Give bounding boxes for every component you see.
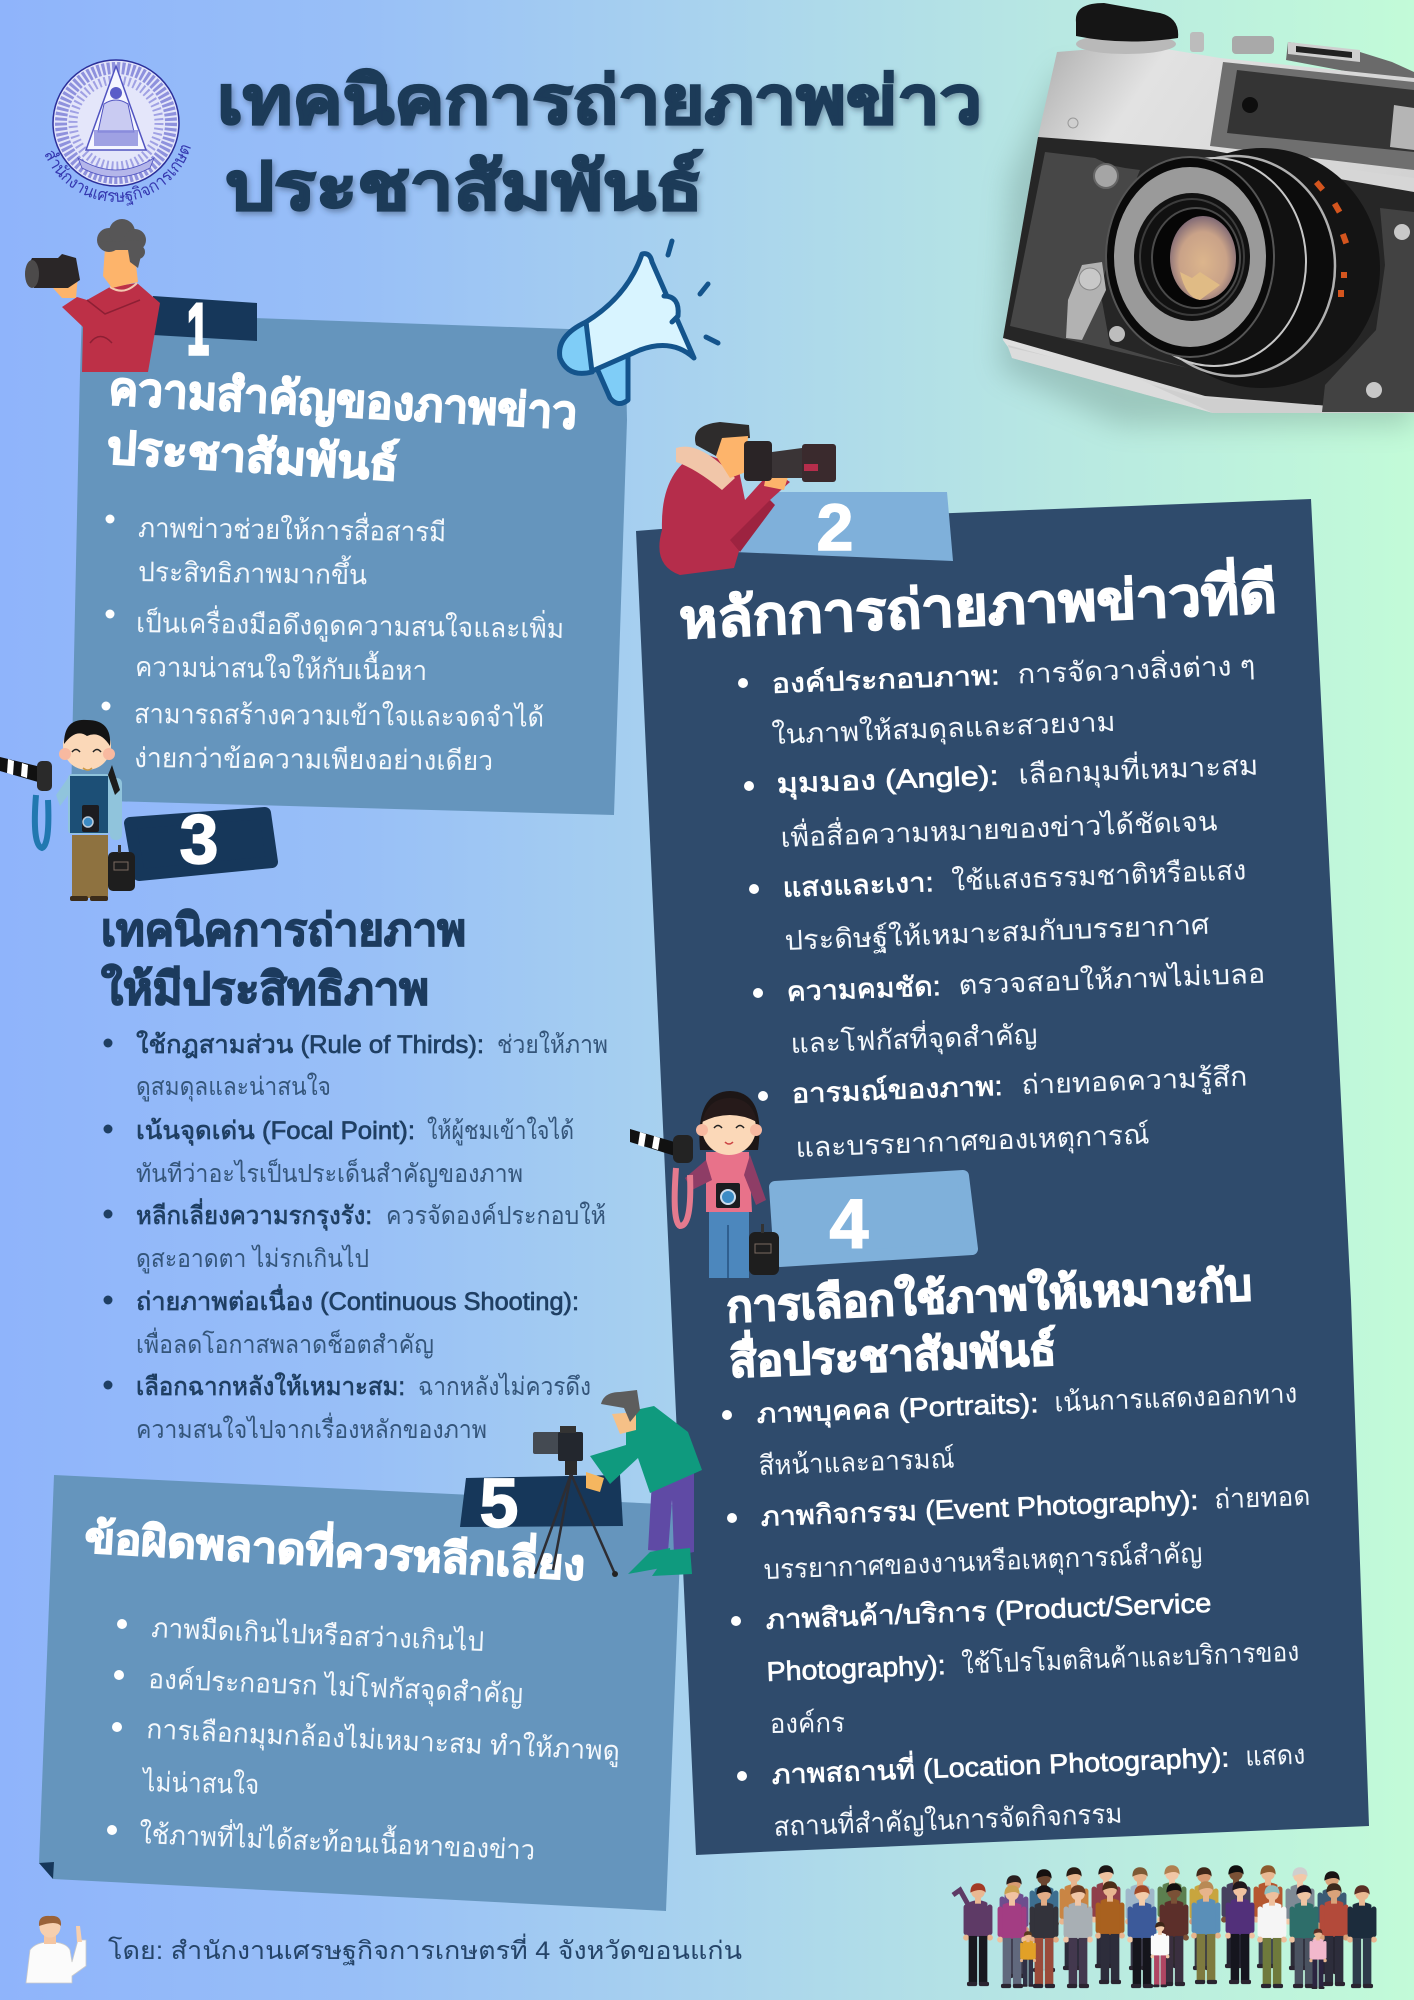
bullet list 3: ความสนใจไปจากเรื่องหลักของภาพ (136, 1412, 487, 1444)
title: ประชาสัมพันธ์ (225, 149, 703, 223)
bullet list 3: ถ่ายภาพต่อเนื่อง (Continuous Shooting): (136, 1284, 579, 1316)
heading 3: เทคนิคการถ่ายภาพ (101, 906, 466, 955)
bullet list 4: สถานที่สำคัญในการจัดกิจกรรม (773, 1795, 1123, 1842)
bullet list 2: ถ่ายทอดความรู้สึก (1021, 1062, 1248, 1101)
footer credit: โดย: สำนักงานเศรษฐกิจการเกษตรที่ 4 จังหวัดขอนแก่น (108, 1933, 742, 1965)
character: man with tripod, green hoodie (533, 1390, 702, 1577)
bullet list 4 (722, 1378, 1311, 1842)
heading 1: ประชาสัมพันธ์ (105, 421, 400, 490)
bullet list 4: เน้นการแสดงออกทาง (1054, 1378, 1298, 1418)
tab number 2 (734, 490, 953, 564)
panel 5: mistakes to avoid (39, 1464, 682, 1911)
tab number 1: 1 (187, 290, 209, 370)
bullet list 2 (738, 646, 1266, 1165)
heading 3 (101, 906, 466, 1014)
heading 4 (725, 1259, 1253, 1387)
panel 2: dark background (636, 499, 1369, 1855)
bullet list 3: เลือกฉากหลังให้เหมาะสม: (136, 1372, 405, 1401)
bullet list 2: เพื่อสื่อความหมายของข่าวได้ชัดเจน (780, 802, 1218, 853)
bullet list 5: องค์ประกอบรก ไม่โฟกัสจุดสำคัญ (148, 1663, 524, 1711)
bullet list 4: ภาพสินค้า/บริการ (Product/Service (765, 1588, 1212, 1635)
title (217, 63, 982, 223)
bullet list 3: ให้ผู้ชมเข้าใจได้ (427, 1116, 574, 1146)
bullet list 4: แสดง (1245, 1740, 1306, 1772)
bullet list 4: Photography): (766, 1650, 946, 1687)
tab number 4: 4 (830, 1185, 869, 1263)
bullet list 2: ในภาพให้สมดุลและสวยงาม (771, 706, 1116, 752)
tab number 4 (775, 1176, 972, 1263)
tab number 2 and panel 2/4 (636, 490, 1369, 1855)
heading 3: ให้มีประสิทธิภาพ (101, 963, 429, 1014)
tab number 2: 2 (817, 490, 853, 564)
heading 1 (105, 362, 579, 490)
heading 4: สื่อประชาสัมพันธ์ (728, 1318, 1057, 1387)
bullet list 1: สามารถสร้างความเข้าใจและจดจำได้ (134, 698, 544, 733)
bullet list 2: ตรวจสอบให้ภาพไม่เบลอ (958, 958, 1266, 1000)
heading 2: หลักการถ่ายภาพข่าวที่ดี (678, 555, 1278, 650)
bullet list 4: ภาพบุคคล (Portraits): (756, 1388, 1039, 1431)
bullet list 4: ถ่ายทอด (1214, 1481, 1311, 1515)
character: photographer, red hoodie (659, 422, 836, 575)
bullet list 4: สีหน้าและอารมณ์ (758, 1442, 955, 1481)
bullet list 3: หลีกเลี่ยงความรกรุงรัง: (136, 1198, 372, 1231)
bullet list 2: อารมณ์ของภาพ: (791, 1070, 1003, 1109)
bullet list 2: ใช้แสงธรรมชาติหรือแสง (951, 854, 1247, 897)
bullet list 1: ง่ายกว่าข้อความเพียงอย่างเดียว (134, 743, 493, 776)
character: boy with camera and bag (0, 720, 135, 901)
bullet list 5: การเลือกมุมกล้องไม่เหมาะสม ทำให้ภาพดู (146, 1713, 621, 1768)
illustration: crowd of people (953, 1865, 1377, 1989)
bullet list 4: ภาพสถานที่ (Location Photography): (771, 1738, 1230, 1790)
bullet list 3: ใช้กฎสามส่วน (Rule of Thirds): (136, 1030, 484, 1059)
fold corner (39, 1862, 54, 1879)
tab number 3: 3 (180, 800, 218, 878)
bullet list 1: เป็นเครื่องมือดึงดูดความสนใจและเพิ่ม (136, 604, 564, 645)
bullet list 3: ช่วยให้ภาพ (497, 1030, 608, 1059)
bullet list 2: และโฟกัสที่จุดสำคัญ (790, 1016, 1038, 1061)
bullet list 3: ฉากหลังไม่ควรดึง (418, 1372, 591, 1401)
logo: agency seal (45, 59, 191, 206)
bullet list 3: เน้นจุดเด่น (Focal Point): (136, 1117, 415, 1146)
bullet list 4: ภาพกิจกรรม (Event Photography): (760, 1485, 1199, 1532)
tab number 1 (153, 290, 257, 370)
bullet list 5 (107, 1613, 621, 1866)
bullet list 4: องค์กร (770, 1707, 845, 1739)
bullet list 5: ภาพมืดเกินไปหรือสว่างเกินไป (151, 1613, 485, 1657)
bullet list 4: ใช้โปรโมตสินค้าและบริการของ (961, 1636, 1300, 1680)
bullet list 1: ประสิทธิภาพมากขึ้น (138, 552, 367, 590)
heading 1: ความสำคัญของภาพข่าว (107, 362, 579, 440)
heading 4: การเลือกใช้ภาพให้เหมาะกับ (725, 1259, 1253, 1332)
tab number 3 (130, 800, 272, 878)
tab number 5 (460, 1464, 623, 1542)
bullet list 3: ทันทีว่าอะไรเป็นประเด็นสำคัญของภาพ (136, 1158, 523, 1188)
character: footer man pointing (26, 1916, 86, 1983)
bullet list 2: องค์ประกอบภาพ: (771, 659, 1000, 699)
title: เทคนิคการถ่ายภาพข่าว (217, 63, 982, 137)
character: girl with camera and bag (630, 1091, 779, 1278)
character: man with camera, red sweater (25, 219, 160, 372)
bullet list 4: บรรยากาศของงานหรือเหตุการณ์สำคัญ (763, 1537, 1203, 1587)
panel 1: importance (71, 290, 627, 815)
heading 5: ข้อผิดพลาดที่ควรหลีกเลี่ยง (83, 1508, 587, 1589)
bullet list 5: ไม่น่าสนใจ (141, 1766, 260, 1800)
bullet list 2: มุมมอง (Angle): (776, 760, 999, 801)
bullet list 5: ใช้ภาพที่ไม่ได้สะท้อนเนื้อหาของข่าว (139, 1814, 536, 1866)
bullet list 1: ภาพข่าวช่วยให้การสื่อสารมี (138, 509, 446, 547)
bullet list 1 (102, 509, 564, 776)
bullet list 2: ประดิษฐ์ให้เหมาะสมกับบรรยากาศ (784, 909, 1210, 957)
bullet list 2: ความคมชัด: (786, 971, 941, 1007)
bullet list 3: เพื่อลดโอกาสพลาดช็อตสำคัญ (136, 1327, 434, 1359)
bullet list 3: ดูสะอาดตา ไม่รกเกินไป (136, 1244, 369, 1274)
photo: vintage camera (1000, 3, 1414, 425)
bullet list 1: ความน่าสนใจให้กับเนื้อหา (135, 647, 427, 686)
bullet list 2: การจัดวางสิ่งต่าง ๆ (1017, 646, 1256, 690)
tab number 5: 5 (480, 1464, 518, 1542)
icon: megaphone (560, 241, 718, 404)
bullet list 3: ควรจัดองค์ประกอบให้ (386, 1201, 606, 1230)
bullet list 2: และบรรยากาศของเหตุการณ์ (795, 1118, 1150, 1165)
bullet list 2: แสงและเงา: (782, 867, 934, 903)
bullet list 2: เลือกมุมที่เหมาะสม (1018, 747, 1259, 792)
bullet list 3 (104, 1030, 608, 1444)
bullet list 3: ดูสมดุลและน่าสนใจ (136, 1072, 331, 1102)
